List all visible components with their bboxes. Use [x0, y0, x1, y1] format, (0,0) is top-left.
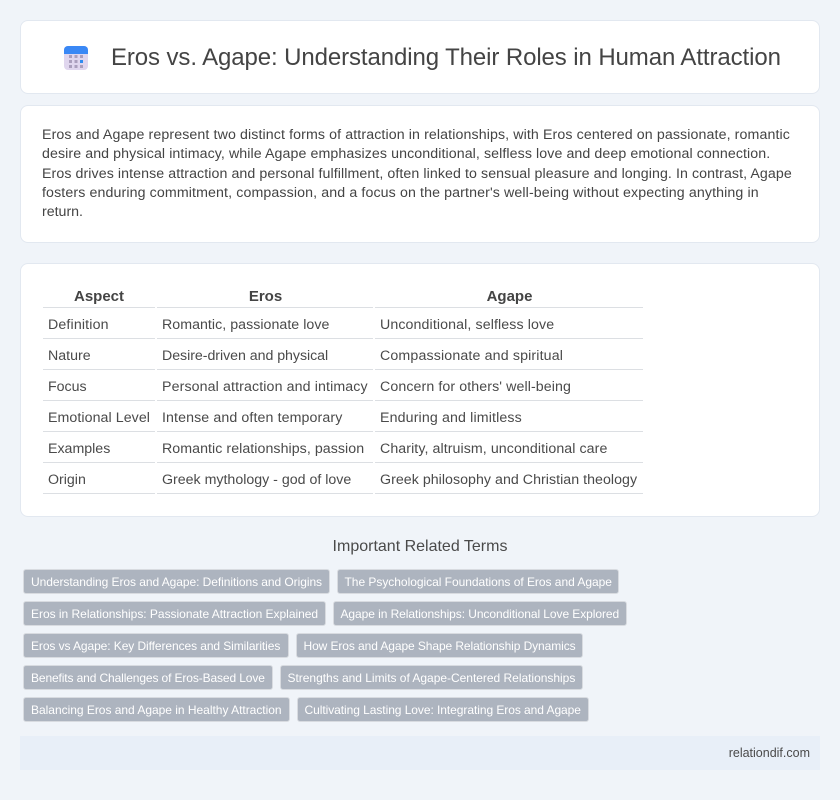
tag: Eros vs Agape: Key Differences and Similarities	[31, 639, 280, 653]
intro paragraph: Eros drives intense attraction and personal fulfillment, often linked to sensual pleasure and longing. In contrast, Agape	[42, 166, 792, 182]
row: origin: Greek philosophy and Christian theology	[380, 472, 637, 488]
tag	[296, 697, 588, 722]
table header row	[43, 288, 643, 308]
intro paragraph: return.	[42, 204, 83, 220]
row: focus: Focus	[48, 379, 87, 395]
title: Eros vs. Agape: Understanding Their Roles in Human Attraction	[111, 44, 781, 71]
intro paragraph: Eros and Agape represent two distinct forms of attraction in relationships, with Eros centered on passionate, romantic	[42, 127, 790, 143]
tag	[23, 633, 288, 658]
table header row: Eros	[249, 288, 282, 305]
row: emotional level: Intense and often temporary	[162, 410, 342, 426]
related terms tags	[23, 569, 627, 722]
tag	[23, 569, 330, 594]
row: nature: Desire-driven and physical	[162, 348, 328, 364]
row: examples: Charity, altruism, unconditional care	[380, 441, 607, 457]
tag: Balancing Eros and Agape in Healthy Attraction	[31, 703, 282, 717]
row: emotional level: Enduring and limitless	[380, 410, 522, 426]
tag	[23, 601, 326, 626]
row: origin: Greek mythology - god of love	[162, 472, 351, 488]
tag	[336, 569, 618, 594]
tag: Understanding Eros and Agape: Definitions and Origins	[31, 575, 322, 589]
tag: The Psychological Foundations of Eros and Agape	[344, 575, 612, 589]
icon: calendar	[64, 46, 88, 70]
footer source: relationdif.com	[729, 746, 810, 760]
row: focus	[43, 379, 643, 401]
tag: Agape in Relationships: Unconditional Love Explored	[340, 607, 619, 621]
row: definition: Romantic, passionate love	[162, 317, 329, 333]
row: nature: Compassionate and spiritual	[380, 348, 563, 364]
tag	[23, 665, 272, 690]
row: focus: Personal attraction and intimacy	[162, 379, 368, 395]
tag: Strengths and Limits of Agape-Centered Relationships	[288, 671, 575, 685]
row: emotional level: Emotional Level	[48, 410, 150, 426]
row: definition: Definition	[48, 317, 109, 333]
tag: How Eros and Agape Shape Relationship Dynamics	[304, 639, 576, 653]
row: focus: Concern for others' well-being	[380, 379, 571, 395]
tag	[296, 633, 582, 658]
row: examples: Examples	[48, 441, 110, 457]
row: nature: Nature	[48, 348, 91, 364]
table header row: Aspect	[74, 288, 124, 305]
row: nature	[43, 348, 643, 370]
intro text card	[20, 105, 820, 243]
table header row: Agape	[487, 288, 532, 305]
intro paragraph: desire and physical intimacy, while Agape emphasizes unconditional, selfless love and deep emotional connection.	[42, 146, 770, 162]
row: origin: Origin	[48, 472, 86, 488]
tag	[280, 665, 582, 690]
intro paragraph	[42, 127, 792, 220]
tag	[23, 697, 290, 722]
row: definition: Unconditional, selfless love	[380, 317, 554, 333]
tag: Benefits and Challenges of Eros-Based Love	[31, 671, 265, 685]
row: examples	[43, 441, 643, 463]
row: examples: Romantic relationships, passion	[162, 441, 364, 457]
tag	[332, 601, 626, 626]
footer bar	[20, 736, 820, 770]
intro paragraph: fosters enduring commitment, compassion, and a focus on the partner's well-being without expecting anything in	[42, 185, 759, 201]
header card	[20, 20, 820, 94]
row: definition	[43, 317, 643, 339]
row: emotional level	[43, 410, 643, 432]
tag: Eros in Relationships: Passionate Attraction Explained	[31, 607, 318, 621]
row: origin	[43, 472, 643, 494]
tag: Cultivating Lasting Love: Integrating Eros and Agape	[304, 703, 581, 717]
related terms heading: Important Related Terms	[333, 538, 507, 555]
comparison table	[43, 288, 643, 494]
comparison table card	[20, 263, 820, 517]
